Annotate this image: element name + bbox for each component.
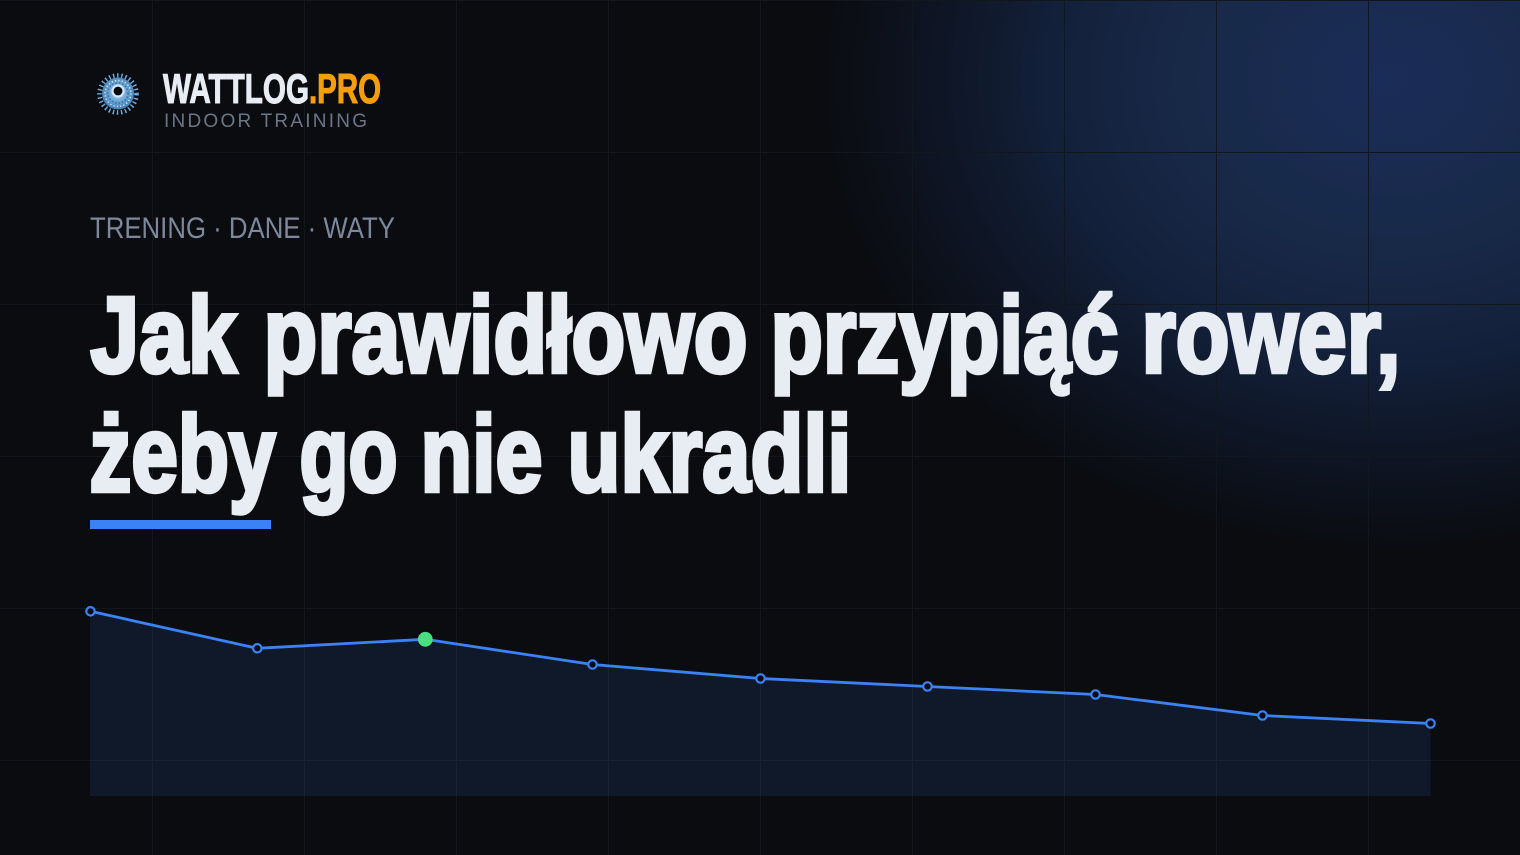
chart line — [90, 611, 1430, 724]
title: Jak — [90, 274, 237, 395]
chart points — [86, 607, 1435, 728]
title: żeby — [90, 393, 276, 514]
chart area — [90, 611, 1430, 796]
title: ukradli — [568, 393, 852, 514]
tagline: INDOOR TRAINING — [164, 111, 367, 132]
icon: bike cassette — [100, 76, 136, 112]
title: prawidłowo — [264, 274, 748, 395]
title: nie — [420, 393, 542, 514]
eyebrow text: TRENING · DANE · WATY — [90, 212, 395, 245]
title: rower, — [1142, 274, 1400, 395]
highlighted point — [418, 632, 433, 647]
brand name: WATTLOG — [163, 65, 309, 112]
title: go — [300, 393, 398, 514]
title: przypiąć — [770, 274, 1118, 395]
line chart — [86, 607, 1435, 796]
logo — [100, 65, 381, 132]
title underline — [90, 520, 271, 529]
title — [90, 274, 1400, 514]
brand suffix: .PRO — [309, 65, 381, 112]
